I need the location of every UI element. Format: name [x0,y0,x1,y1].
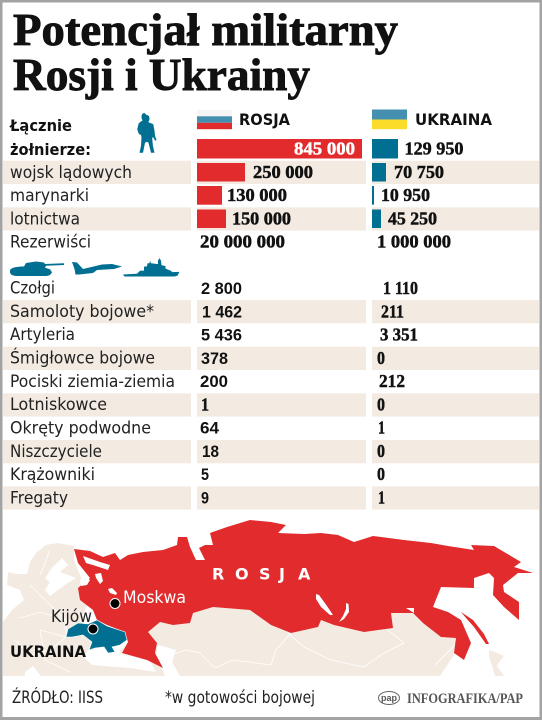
table row bands [3,161,539,510]
bar chart: Ukraine forces: 45 250 [388,208,437,228]
map: Asia land [120,607,456,676]
marker: Kijów [88,624,98,634]
heading: Ukraina: UKRAINA [415,110,493,129]
map: Russia waters [80,556,414,622]
map: seas [25,558,180,676]
Russia equipment values: 378 [201,349,228,368]
marker: Moskwa [110,598,120,608]
Russia equipment values: 5 [201,465,209,484]
heading: total soldiers: żołnierze: [10,140,91,159]
Ukraine equipment values [377,278,418,508]
bar chart: Ukraine forces: 70 750 [394,162,444,182]
Ukraine equipment values: 1 [378,418,385,438]
Ukraine equipment values: 0 [377,394,385,414]
equipment row labels: Lotniskowce [10,395,107,414]
personnel row labels: lotnictwa [10,210,80,228]
map: Russia [74,520,533,668]
Ukraine equipment values: 0 [377,464,385,484]
heading: Rosja: ROSJA [239,110,291,129]
equipment row labels: Śmigłowce bojowe [10,348,155,368]
Russia equipment values: 2 800 [201,279,242,298]
title: Rosji i Ukrainy [13,50,310,100]
map: Japan [489,650,504,676]
bar chart: Russia forces: 150 000 [232,208,291,228]
heading: total soldiers: Łącznie [9,116,72,135]
bar chart: Russia forces: 130 000 [227,185,287,205]
personnel row labels: marynarki [10,186,89,205]
icons: tank, plane, ship [10,258,180,276]
Ukraine equipment values: 1 110 [383,278,418,298]
credit: PAP logo: INFOGRAFIKA/PAP [407,691,523,707]
bar chart: Ukraine forces: 10 950 [381,185,430,205]
label: Rosja: ROSJA [212,564,311,584]
source: ŹRÓDŁO: IISS [12,688,103,707]
map: Ukraine [66,620,127,653]
Ukraine equipment values: 211 [381,302,404,322]
label: Moskwa: Moskwa [123,588,186,607]
bar chart: Russia forces: 845 000 [294,138,355,158]
reserves values: 20 000 000 [200,232,285,252]
title: Potencjał militarny [13,5,399,55]
map: Europe land [3,543,170,676]
equipment row labels: Okręty podwodne [10,418,151,438]
reserves values: 1 000 000 [377,232,451,252]
map [3,520,533,676]
equipment row labels: Krążowniki [10,465,95,484]
Ukraine equipment values: 212 [379,371,405,391]
bar chart: Ukraine forces: 129 950 [404,138,464,158]
Russia equipment values: 1 462 [202,302,242,322]
icon: ship [123,258,180,276]
Ukraine equipment values: 3 351 [380,324,418,344]
Ukraine equipment values: 0 [377,348,385,368]
Russia equipment values [200,279,242,508]
bar chart: Ukraine forces [372,138,464,228]
equipment row labels: Niszczyciele [10,442,102,461]
Ukraine equipment values: 1 [378,488,385,508]
footnote: *w gotowości bojowej [165,688,315,707]
map: country borders [15,550,455,672]
equipment row labels: Czołgi [10,278,55,298]
Russia equipment values: 18 [202,442,219,461]
equipment row labels [10,278,175,508]
equipment row labels: Fregaty [10,488,68,508]
label: Kijów: Kijów [51,607,92,626]
heading: total soldiers [9,116,91,159]
personnel row labels [10,163,132,252]
personnel row labels: wojsk lądowych [10,163,132,182]
Russia equipment values: 200 [200,372,228,391]
equipment row labels: Samoloty bojowe* [10,302,154,321]
personnel row labels: Rezerwiści [10,232,91,252]
map: Sakhalin [461,612,489,644]
icon: plane [72,262,122,274]
icon: soldier [137,113,156,153]
bar chart: Russia forces: 250 000 [253,162,313,182]
equipment row labels: Artyleria [10,325,75,344]
credit: PAP logo: pap [381,693,397,703]
Russia equipment values: 9 [201,488,209,508]
Russia equipment values: 64 [200,418,220,438]
Ukraine equipment values: 0 [377,441,385,461]
bar chart: Russia forces [197,138,362,228]
label: Ukraina: UKRAINA [10,642,87,661]
flag: Ukraine [372,110,407,129]
title [13,5,399,100]
Russia equipment values: 1 [201,394,209,414]
reserves values [200,232,451,252]
equipment row labels: Pociski ziemia-ziemia [10,372,175,391]
icon: tank [10,262,64,276]
Russia equipment values: 5 436 [201,326,242,344]
flag: Russia [197,110,232,129]
